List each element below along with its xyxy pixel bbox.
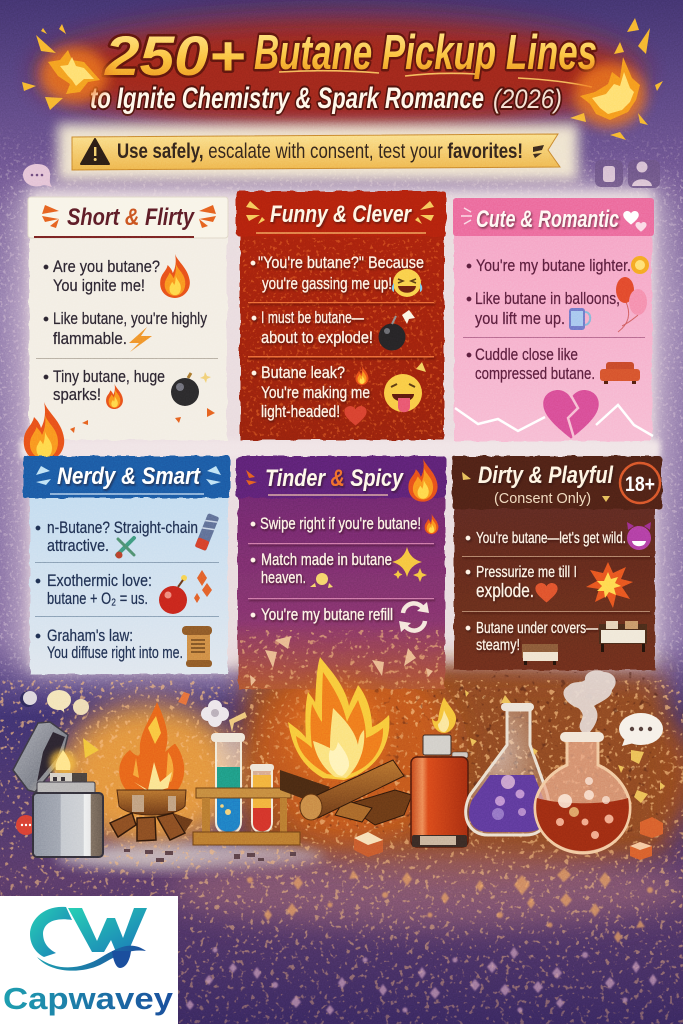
icon: header fire [408,458,438,502]
panel header: Nerdy & Smart [57,463,201,490]
list items: You're butane—let's get wild. [476,530,626,547]
illustration: small cubes [354,817,663,860]
icon: speech bubble top left [23,164,52,187]
icon: refresh arrows [403,603,425,631]
illustration: steam [563,670,616,732]
title line 2: (2026) [493,84,562,114]
panel header: Tinder & Spicy [265,465,404,492]
warning banner [58,124,578,180]
icon: large bed [599,621,647,652]
icon: corner flame [24,402,64,462]
illustration: round flask [535,732,630,853]
illustration: red lighter [411,697,468,847]
illustration: white speech bubble [619,713,663,746]
list items: compressed butane. [475,364,595,383]
title line 1: 250+ [104,24,245,87]
list items: steamy! [476,637,520,654]
panel header [453,198,654,236]
panel: cute and romantic [453,198,654,441]
list items: Exothermic love: [47,571,152,590]
icon: people badges top right [595,160,660,188]
list items: heaven. [261,568,306,587]
list items [463,256,645,383]
list items: attractive. [47,536,109,555]
list items: butane + O₂ = us. [47,589,148,608]
illustration: floor pebbles [124,849,296,862]
icon: crossed tools [116,538,134,558]
list items [248,514,434,624]
icon: spark [416,362,426,372]
icon: explosion [586,562,633,608]
list items: Are you butane? [53,257,160,276]
list items: Match made in butane [261,550,392,569]
decoration: white wavy line [455,405,653,436]
panel header [452,456,662,509]
illustration: bonfire [263,657,413,825]
panel header [23,456,230,498]
icon: small fire [106,384,123,409]
badge: 18+: 18+ [625,473,655,496]
list items: You're making me [261,383,370,402]
icon: heart [535,583,558,602]
illustration: test tubes [193,733,300,845]
list items: n-Butane? Straight-chain [47,518,198,537]
icon: right flame burst [570,18,663,140]
icon: laughing face [392,269,422,297]
list items: Like butane in balloons, [475,289,620,308]
panel header: Dirty & Playful [478,462,614,489]
icon: sparkles [392,547,427,582]
list items: you're gassing me up! [262,274,392,293]
illustration: erlenmeyer flask [466,703,549,835]
icon: bomb [378,310,415,350]
icon: firework tube [195,513,219,551]
icon: phone mug [569,308,590,330]
list items [36,257,218,404]
icon: warning triangle [81,139,109,164]
list items [248,253,434,421]
panel header [28,197,228,238]
fallen confetti [250,636,433,686]
icon: heart [344,406,367,425]
icon: diamonds [194,570,212,603]
panel: tinder and spicy [236,456,446,689]
list items: Tiny butane, huge [53,367,165,386]
icon: sofa [600,362,640,384]
list items: You're my butane refill [261,605,393,624]
list items: light-headed! [261,402,340,421]
list items: you lift me up. [475,309,565,328]
title [90,24,597,115]
illustration: gold droplets [465,690,665,803]
banner text: Use safely, escalate with consent, test your favorites! [117,140,523,163]
list items: explode. [476,581,534,602]
list items: I must be butane— [261,308,364,327]
panel header: Short & Flirty [67,204,195,231]
icon: broken heart [543,390,599,439]
panel header: Funny & Clever [270,201,412,228]
logo: Capwavey [0,896,178,1024]
list items: Butane leak? [261,363,345,382]
title line 2: to Ignite Chemistry & Spark Romance [90,82,484,115]
icon: bomb [171,372,211,406]
icon: red bomb [159,575,187,614]
illustration: small speech bubbles [20,690,247,758]
confetti [70,408,215,433]
list items: flammable. [53,329,127,348]
list items: Graham's law: [47,626,133,645]
background confetti [186,868,657,1015]
panel header [236,191,446,236]
icon: burst [631,256,649,274]
panel: dirty and playful [452,456,662,670]
list items: You're my butane lighter. [476,256,631,275]
list items: You diffuse right into me. [47,643,183,662]
badge: 18+ [620,463,660,503]
list items: about to explode! [261,328,373,347]
title line 1 [104,24,597,87]
panel header: Cute & Romantic [476,206,619,233]
icon: small speech bubble [310,573,333,588]
illustration: silver lighter [13,722,103,857]
icon: tongue face [384,374,422,412]
icon: left flame burst [22,24,108,110]
list items: Like butane, you're highly [53,309,207,328]
icon: fire [160,254,190,298]
list items: Cuddle close like [475,345,578,364]
icon: small flag [533,145,544,158]
icon: scroll [182,626,212,667]
illustration: red bubble [16,815,36,835]
list items: Butane under covers— [476,620,598,637]
panel header [236,456,446,498]
list items: Swipe right if you're butane! [260,514,421,533]
icon: devil [627,522,651,550]
logo text: Capwavey [3,981,174,1016]
list items [462,530,650,654]
list items: "You're butane?" Because [258,253,424,272]
list items [35,518,219,662]
list items: You ignite me! [53,276,145,295]
panel: nerdy and smart [23,456,230,674]
illustration: campfire [110,702,193,841]
list items: Pressurize me till I [476,564,577,581]
icon: flame [425,514,438,534]
icon: small bed [522,644,558,665]
panel header: (Consent Only) [494,490,591,507]
icon: balloons [616,277,647,332]
icon: lightning [129,327,152,352]
panel: funny and clever [236,191,446,440]
panel: short and flirty [28,197,228,440]
list items: sparks! [53,385,101,404]
logo mark [30,907,147,971]
icon: flame [356,366,368,385]
